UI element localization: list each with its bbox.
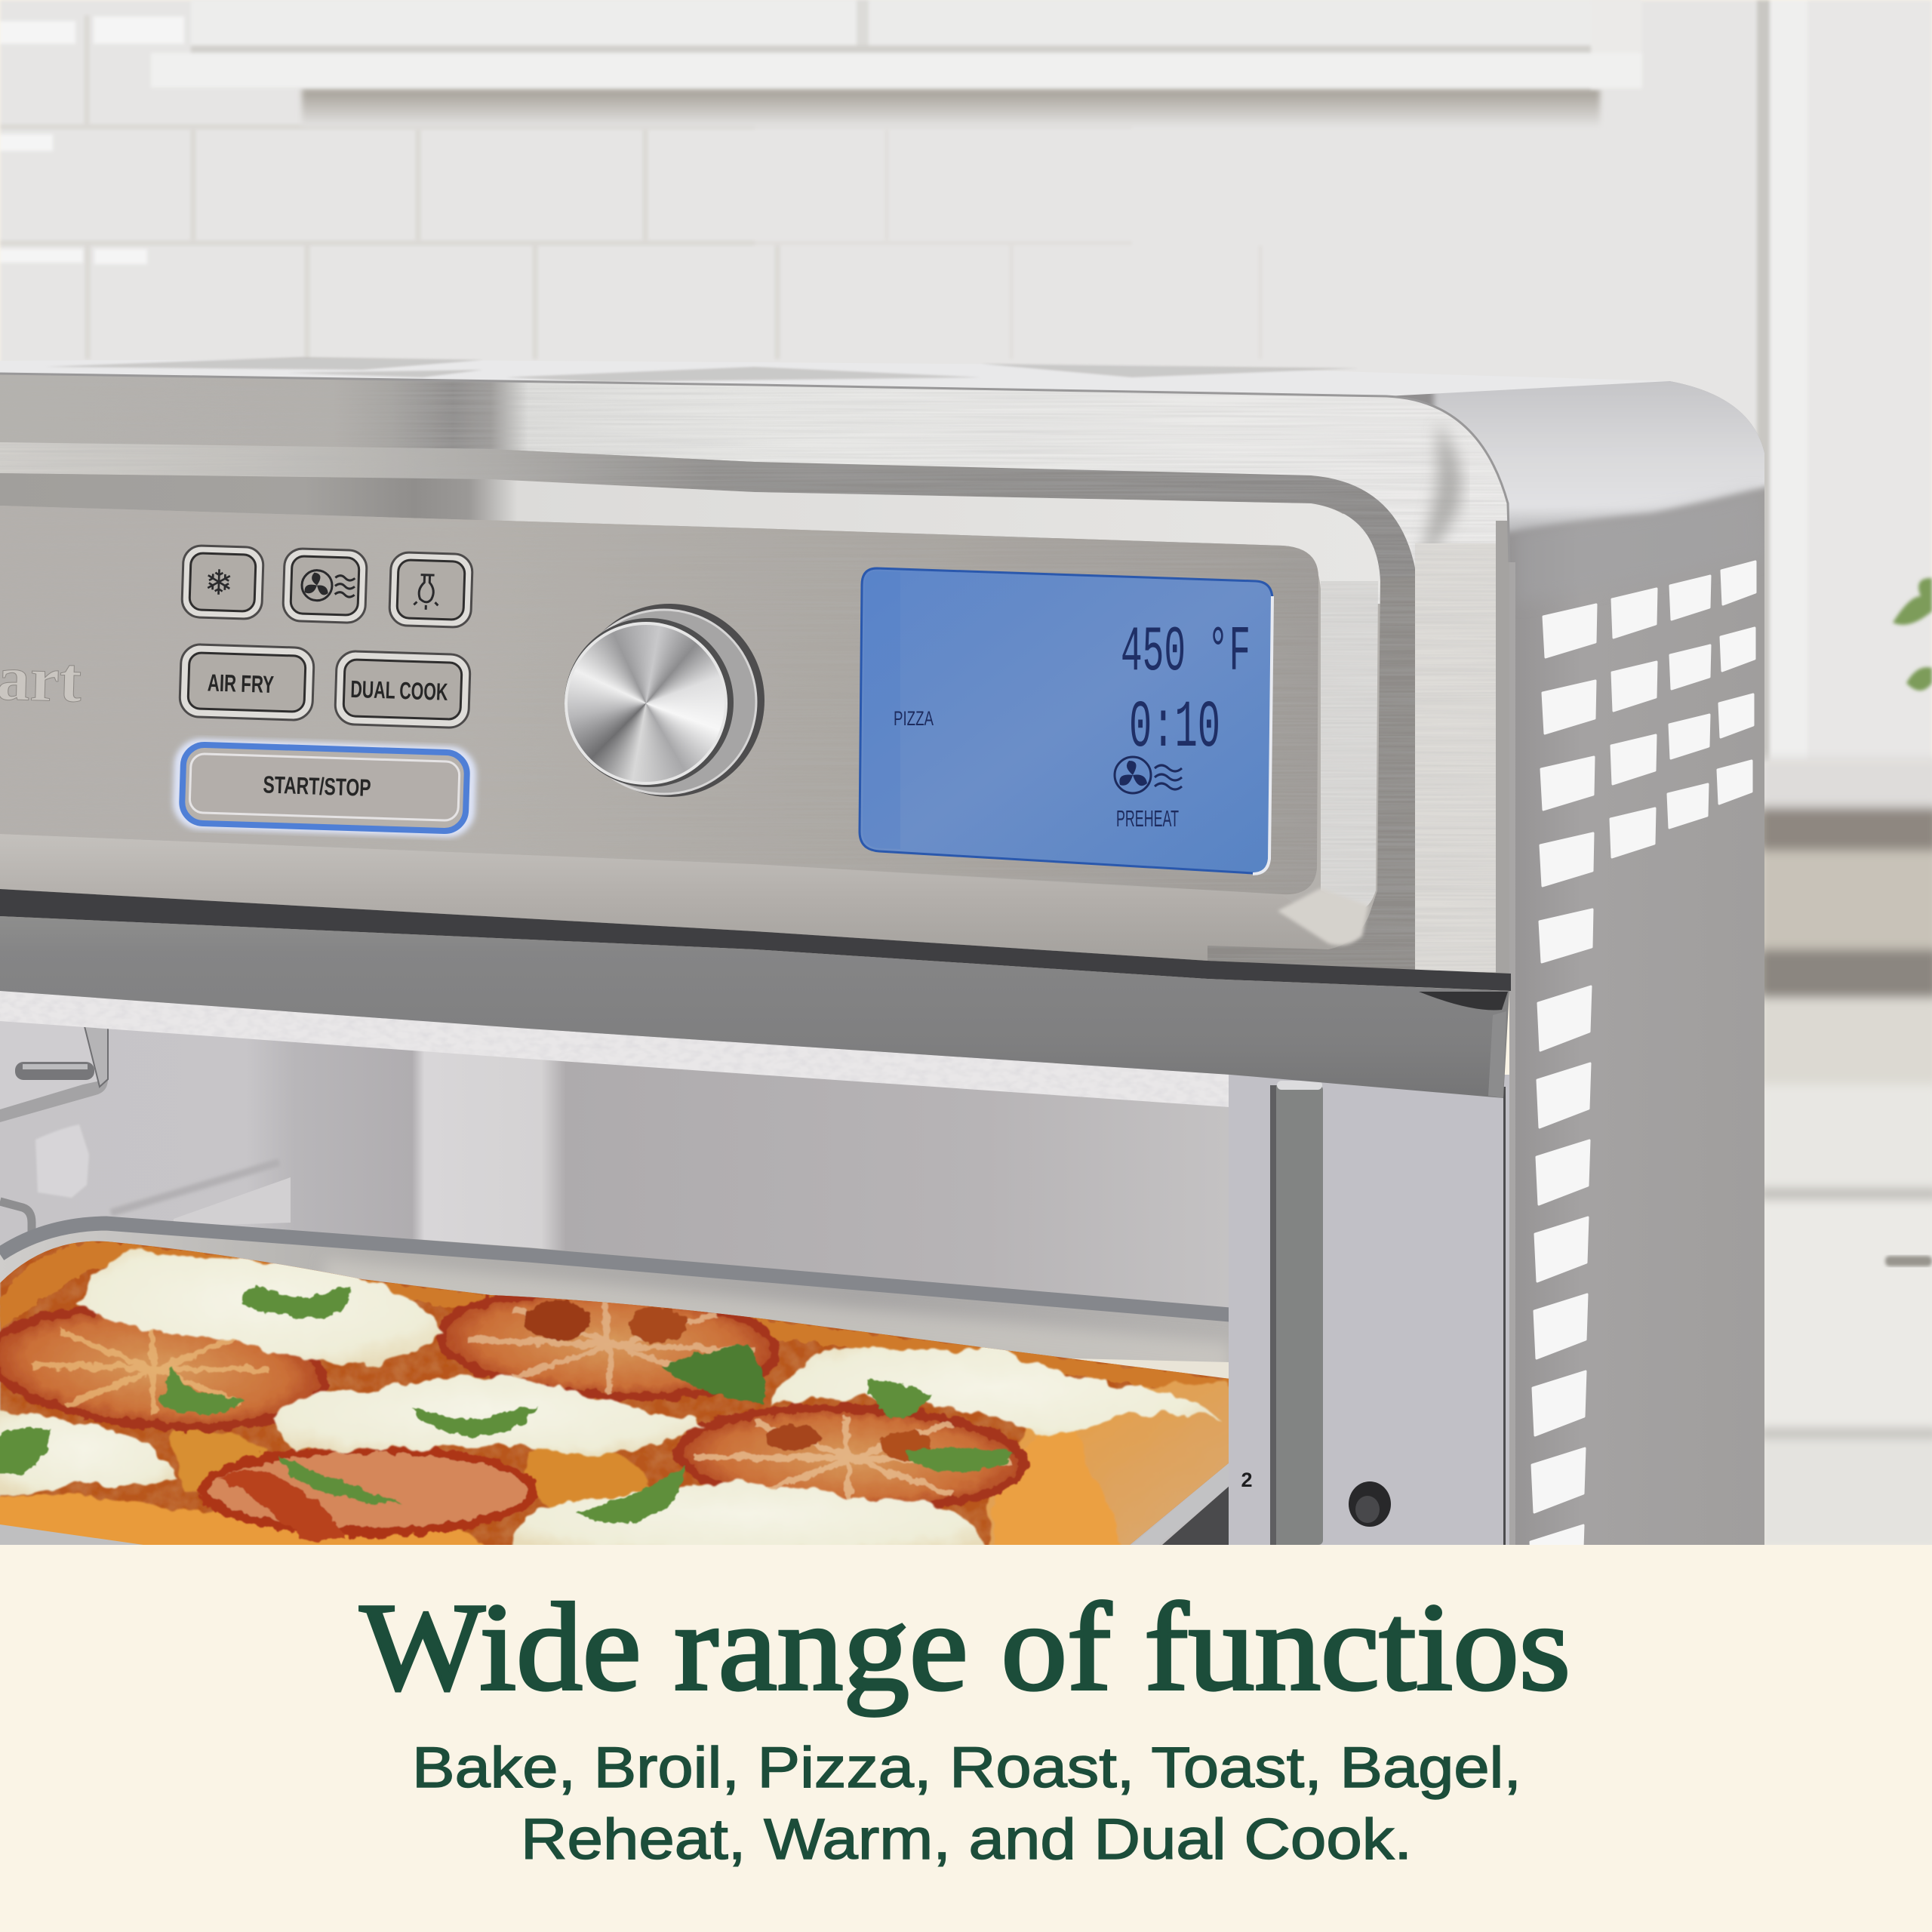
button: start/stop lit: START/STOP xyxy=(263,771,371,801)
mozzarella xyxy=(0,1249,1220,1555)
pizza xyxy=(0,1230,1245,1555)
corner swoosh xyxy=(1419,423,1461,574)
oven cavity xyxy=(0,981,1245,1555)
icon: fan and heat xyxy=(301,570,355,601)
oven side panel xyxy=(1358,362,1781,1589)
button: start/stop lit xyxy=(177,743,472,833)
button: air fry xyxy=(180,644,314,721)
door handle trim xyxy=(0,916,1509,1098)
LCD display xyxy=(860,568,1272,874)
upper cabinet xyxy=(151,0,1642,89)
baking pan xyxy=(0,1217,1230,1434)
button: dual cook: DUAL COOK xyxy=(350,675,448,706)
pizza back crust xyxy=(0,1241,1230,1396)
rack number: 2 xyxy=(1241,1469,1253,1491)
lower band xyxy=(0,834,1358,961)
left rack hardware xyxy=(0,1021,291,1259)
LCD mode label: PIZZA xyxy=(894,707,934,730)
toaster oven xyxy=(0,357,1781,1589)
rack hook xyxy=(0,1201,32,1259)
LCD preheat label: PREHEAT xyxy=(1116,805,1179,832)
glossy tile highlights xyxy=(0,17,184,264)
heading: Wide range of functios xyxy=(360,1577,1571,1716)
door frame right xyxy=(1229,1075,1509,1545)
knob face xyxy=(568,625,724,782)
counter and lower cabinets xyxy=(1758,758,1932,1551)
bright ridge xyxy=(0,473,1380,589)
right slot reflection xyxy=(1321,581,1378,909)
door channel xyxy=(1270,1085,1323,1545)
LCD fan icon xyxy=(1115,757,1182,793)
basil leaves xyxy=(0,1284,1015,1523)
body text: Bake, Broil, Pizza, Roast, Toast, Bagel, xyxy=(412,1736,1521,1800)
caption band xyxy=(0,1545,1932,1932)
LCD left shade xyxy=(863,571,900,849)
button: air fry: AIR FRY xyxy=(207,669,274,698)
brushed control plate xyxy=(0,506,1318,894)
button: dual cook xyxy=(335,651,470,728)
top surface xyxy=(0,357,1669,396)
top brushed band xyxy=(0,374,1509,604)
golden crust xyxy=(0,1383,1245,1555)
pan front rim xyxy=(0,1463,1230,1545)
button: convection fan xyxy=(283,548,367,623)
corner blob reflection xyxy=(1278,888,1368,945)
subway tile grout xyxy=(0,15,1260,359)
right brushed strip xyxy=(1415,543,1496,972)
cabinet drawer handle xyxy=(1885,1256,1932,1266)
icon: light bulb xyxy=(414,574,439,610)
foil strip xyxy=(0,991,1230,1107)
tomato slices xyxy=(0,1281,1025,1540)
ridge dark band xyxy=(0,442,1417,581)
front control panel xyxy=(0,374,1509,975)
wire rack bar xyxy=(111,1162,279,1213)
door screw knob xyxy=(1349,1481,1391,1527)
side top curved highlight xyxy=(1434,362,1781,604)
LCD temperature: 450 °F xyxy=(1121,617,1251,689)
plant leaves xyxy=(1893,578,1932,691)
body text xyxy=(412,1736,1521,1872)
button: oven light xyxy=(389,552,472,628)
right wall column xyxy=(1757,0,1770,762)
pizza base and sauce xyxy=(0,1230,1230,1547)
dark recess band xyxy=(1208,577,1417,971)
icon: snowflake: ❄ xyxy=(204,561,234,603)
cabinet underside shadow xyxy=(302,89,1600,127)
LCD timer: 0:10 xyxy=(1129,691,1220,766)
side vents xyxy=(1531,561,1755,1589)
body text: Reheat, Warm, and Dual Cook. xyxy=(521,1807,1412,1872)
control knob xyxy=(565,604,764,797)
photo background: kitchen xyxy=(0,0,1932,762)
panel corner edge xyxy=(0,374,1509,562)
door gasket xyxy=(0,889,1511,991)
button: defrost xyxy=(182,545,263,620)
